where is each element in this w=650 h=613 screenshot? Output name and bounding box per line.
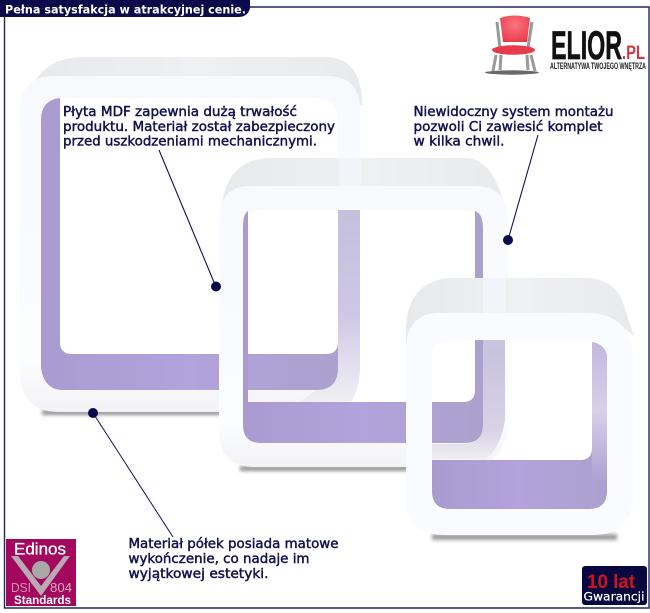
callout: mounting system [414, 105, 614, 245]
badge 804: 804 [50, 580, 72, 595]
medium cube shadow [240, 466, 415, 471]
warranty background [582, 566, 647, 605]
large shelf cube [20, 57, 362, 415]
medium cube back shell [221, 158, 508, 225]
warranty years: 10 lat [587, 572, 636, 593]
warranty label: Gwarancji [584, 590, 644, 604]
small cube front ring [406, 313, 633, 535]
icon: red chair [485, 16, 539, 75]
badge: 10 years warranty [582, 566, 647, 605]
medium shelf cube [219, 158, 508, 471]
callout text: wykończenie, co nadaje im [128, 552, 310, 567]
callout text: Niewidoczny system montażu [414, 105, 614, 120]
small cube shadow [432, 534, 617, 540]
callout text: wyjątkowej estetyki. [128, 567, 268, 582]
large cube front ring [20, 76, 360, 412]
small cube back shell [406, 278, 634, 352]
small shelf cube [406, 278, 634, 540]
leader dot [88, 408, 98, 418]
medium cube right tint [432, 278, 505, 459]
callout: MDF board [63, 105, 335, 292]
callout text: przed uszkodzeniami mechanicznymi. [63, 134, 317, 150]
badge V mark [11, 556, 70, 596]
badge circle [32, 561, 50, 579]
leader line [159, 150, 216, 287]
small cube right strip [592, 342, 607, 480]
leader dot [211, 282, 221, 292]
large cube purple interior [41, 98, 338, 390]
small cube purple interior [432, 342, 607, 509]
callout text: Płyta MDF zapewnia dużą trwałość [63, 105, 297, 120]
callout text: pozwoli Ci zawiesić komplet [414, 120, 602, 135]
badge name: Edinos [14, 540, 66, 558]
small cube light seam [483, 278, 505, 313]
leader line [93, 413, 173, 537]
logo: Elior.pl [485, 16, 646, 75]
leader line [508, 135, 538, 240]
title bar [0, 0, 250, 17]
badge standards: Standards [14, 593, 71, 607]
medium cube front ring [219, 186, 508, 467]
title background [0, 0, 250, 17]
large cube shadow [42, 410, 222, 415]
badge: Edinos DSI 804 Standards [6, 539, 76, 607]
callout text: w kilka chwil. [414, 134, 504, 150]
title text: Pełna satysfakcja w atrakcyjnej cenie. [5, 2, 246, 16]
callout: matte finish [88, 408, 338, 582]
large cube right inner strip [300, 205, 360, 402]
leader dot [503, 235, 513, 245]
callout text: Materiał półek posiada matowe [128, 537, 338, 552]
badge background [6, 539, 76, 606]
medium cube purple interior [243, 211, 483, 443]
medium cube light seam [339, 158, 361, 187]
large cube back shell [30, 57, 362, 105]
badge DSI: DSI [11, 580, 31, 595]
callout text: produktu. Materiał został zabezpieczony [63, 120, 335, 135]
